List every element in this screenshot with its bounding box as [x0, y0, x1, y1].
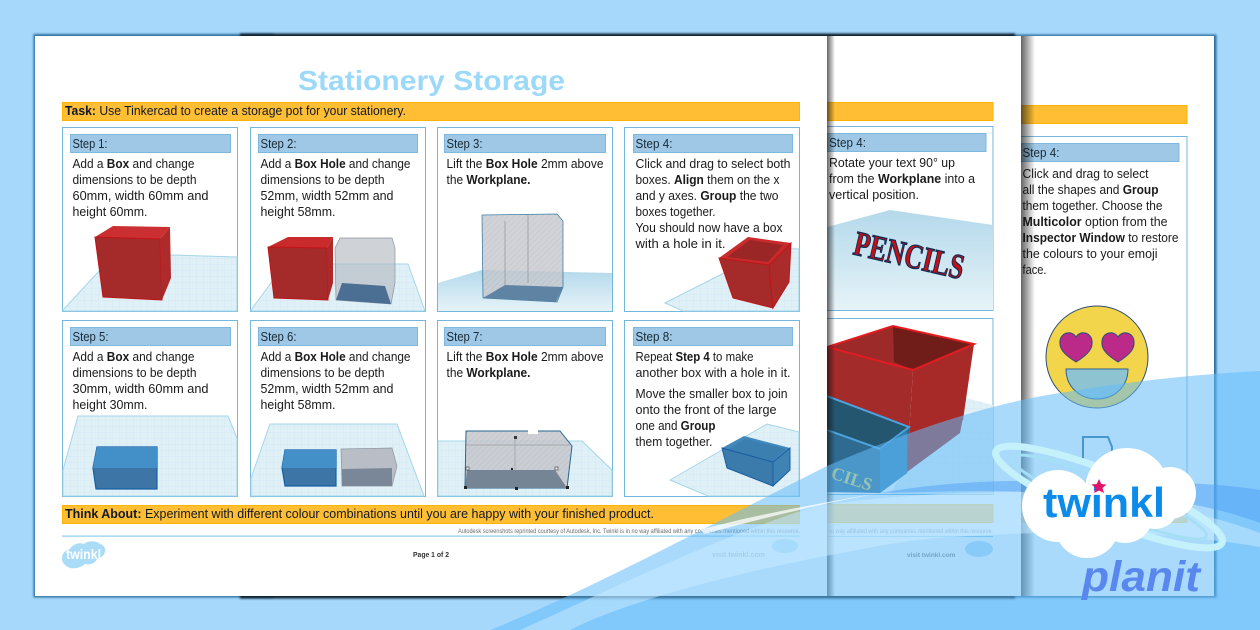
- step text: Add a Box and change: [72, 156, 194, 171]
- footer strip: no way affiliated with any companies mentioned within this resource.: [828, 529, 993, 535]
- red cube: [95, 226, 171, 300]
- box hole lifted: [464, 430, 572, 490]
- step text: and y axes. Group the two: [636, 188, 778, 203]
- workplane: [63, 416, 237, 496]
- box hole lifted: [482, 214, 563, 302]
- yellow letters: CILS: [829, 463, 875, 495]
- step heading: [70, 328, 230, 346]
- step text: [829, 155, 976, 202]
- step text: all the shapes and Group: [1022, 182, 1159, 197]
- footer line: [62, 536, 800, 537]
- step text: height 58mm.: [260, 397, 336, 412]
- visit twinkl: [712, 539, 798, 559]
- copyright note: Autodesk screenshots reprinted courtesy of Autodesk, Inc. Twinkl is in no way affiliated with any companies mentioned within this resource.: [458, 529, 800, 535]
- shadow on page 3: [1021, 36, 1035, 596]
- step text: [72, 349, 208, 412]
- step panel: [1010, 136, 1187, 506]
- step label: Step 8:: [636, 329, 672, 344]
- cloud: [1022, 448, 1196, 558]
- step text: from the Workplane into a: [829, 171, 976, 186]
- step panel: pencils: [815, 126, 993, 310]
- footer strip: visit twinkl.com: [907, 552, 956, 559]
- step label: Step 3:: [446, 136, 482, 151]
- step text: height 60mm.: [72, 204, 148, 219]
- panel: step 7: [438, 320, 612, 496]
- step text: Repeat Step 4 to make: [636, 349, 754, 364]
- step text: [634, 156, 790, 251]
- wave overlay: light band: [520, 492, 1260, 630]
- step text: 30mm, width 60mm and: [72, 381, 208, 396]
- step text: dimensions to be depth: [72, 365, 196, 380]
- step text: height 30mm.: [72, 397, 148, 412]
- step text: Rotate your text 90° up: [829, 155, 955, 170]
- wave overlay: large translucent swoosh: [490, 371, 1260, 630]
- red hollow box: [719, 237, 791, 308]
- step text: 52mm, width 52mm and: [260, 188, 394, 203]
- twinkl logo small: [62, 541, 105, 568]
- step text: [1022, 166, 1178, 277]
- step heading: [70, 134, 230, 152]
- panel: step 5: [62, 320, 238, 496]
- icon: heart-eyes emoji: [1046, 306, 1148, 408]
- step label: Step 4:: [1022, 145, 1060, 160]
- step text: the Workplane.: [446, 172, 530, 187]
- box hole: [341, 448, 397, 486]
- step label: Step 1:: [72, 136, 108, 151]
- step text: the Workplane.: [446, 365, 530, 380]
- workplane: [251, 424, 424, 496]
- step text: Lift the Box Hole 2mm above: [446, 349, 604, 364]
- planit wordmark: planit: [1081, 553, 1202, 601]
- step text: them together. Choose the: [1022, 198, 1162, 213]
- panel: step 6: [250, 320, 426, 496]
- step text: height 58mm.: [260, 204, 336, 219]
- step heading: [634, 134, 792, 152]
- step text: [446, 349, 604, 380]
- panel: step 8: [624, 320, 800, 496]
- page 1: front sheet: [35, 36, 835, 596]
- step text: boxes. Align them on the x: [636, 172, 780, 187]
- wave overlay: dark band: [880, 481, 1260, 523]
- step panel: finished pot: [815, 318, 993, 495]
- step label: Step 7:: [446, 329, 482, 344]
- wave overlay: white streak: [700, 493, 880, 534]
- step text: Lift the Box Hole 2mm above: [446, 156, 604, 171]
- step text: another box with a hole in it.: [636, 365, 790, 380]
- red cube: [268, 237, 333, 300]
- step label: Step 4:: [829, 135, 866, 150]
- step label: Step 6:: [260, 329, 296, 344]
- step text: one and Group: [636, 418, 716, 433]
- step text: Inspector Window to restore: [1022, 230, 1178, 245]
- workplane: [665, 248, 799, 311]
- think about bar: [62, 506, 800, 524]
- panel: step 3: [438, 128, 612, 312]
- step label: Step 2:: [260, 136, 296, 151]
- step text: with a hole in it.: [634, 236, 726, 251]
- 3D PENCILS text: PENCILS: [850, 224, 968, 287]
- think about bar: [1021, 504, 1187, 522]
- blue box: [282, 450, 336, 486]
- step heading: [634, 328, 792, 346]
- panel: step 2: [250, 128, 426, 312]
- step text: [260, 156, 410, 219]
- task bar: Task: Use Tinkercad to create a storage pot for your stationery.: [65, 103, 406, 118]
- step text: Click and drag to select both: [636, 156, 790, 171]
- step text: dimensions to be depth: [260, 172, 384, 187]
- footer strip: [827, 529, 993, 559]
- workplane: [63, 255, 237, 311]
- shadow on page 2: [827, 36, 835, 596]
- task bar: [62, 102, 800, 120]
- step text: Click and drag to select: [1022, 166, 1149, 181]
- step text: Add a Box and change: [72, 349, 194, 364]
- workplane: [670, 424, 799, 496]
- panel: step 4: [624, 128, 800, 312]
- logo: twinkl planit: [987, 429, 1231, 601]
- step text: 52mm, width 52mm and: [260, 381, 394, 396]
- workplane: [251, 264, 425, 311]
- task bar: [820, 102, 993, 120]
- icon: pencil outline: [1083, 437, 1112, 460]
- step text: You should now have a box: [636, 220, 783, 235]
- step text: [72, 156, 208, 219]
- page 2: middle sheet: [815, 36, 1035, 596]
- step text: them together.: [636, 434, 712, 449]
- workplane: [438, 441, 612, 496]
- step heading: [258, 328, 418, 346]
- twinkl logo small: twinkl: [66, 546, 101, 562]
- step text: Add a Box Hole and change: [260, 349, 410, 364]
- blue box: [93, 447, 157, 489]
- step text: dimensions to be depth: [260, 365, 384, 380]
- page 3: back sheet: [1010, 36, 1214, 596]
- step text: vertical position.: [829, 187, 919, 202]
- page number: Page 1 of 2: [413, 550, 449, 559]
- step heading: [1021, 144, 1179, 162]
- workplane: [827, 210, 993, 310]
- step label: Step 5:: [72, 329, 108, 344]
- step text: the colours to your emoji: [1022, 246, 1158, 261]
- title: Stationery Storage: [298, 65, 565, 96]
- think about bar: [820, 504, 993, 522]
- step text: 60mm, width 60mm and: [72, 188, 208, 203]
- box hole: [335, 238, 395, 304]
- step text: Multicolor option from the: [1022, 214, 1168, 229]
- step text: [636, 349, 790, 449]
- step heading: [258, 134, 418, 152]
- step heading: [827, 134, 986, 152]
- step text: onto the front of the large: [636, 402, 776, 417]
- think about bar: Think About: Experiment with different colour combinations until you are happy with your finished product.: [65, 506, 654, 521]
- step text: dimensions to be depth: [72, 172, 196, 187]
- step text: [260, 349, 410, 412]
- step text: [446, 156, 604, 187]
- rings: [987, 429, 1231, 565]
- workplane: [890, 394, 993, 494]
- panel: step 1: [62, 128, 238, 312]
- step label: Step 4:: [636, 136, 672, 151]
- step heading: [444, 328, 606, 346]
- star: [1092, 479, 1106, 493]
- step text: Move the smaller box to join: [636, 386, 788, 401]
- step text: boxes together.: [636, 204, 716, 219]
- blue hollow box: [722, 436, 790, 486]
- twinkl wordmark: twinkl: [1043, 479, 1165, 526]
- step text: Add a Box Hole and change: [260, 156, 410, 171]
- task bar: [1021, 106, 1187, 124]
- step heading: [444, 134, 606, 152]
- step text: face.: [1022, 262, 1046, 277]
- workplane: [438, 270, 612, 311]
- red box: [827, 326, 974, 495]
- visit twinkl: visit twinkl.com: [712, 552, 765, 559]
